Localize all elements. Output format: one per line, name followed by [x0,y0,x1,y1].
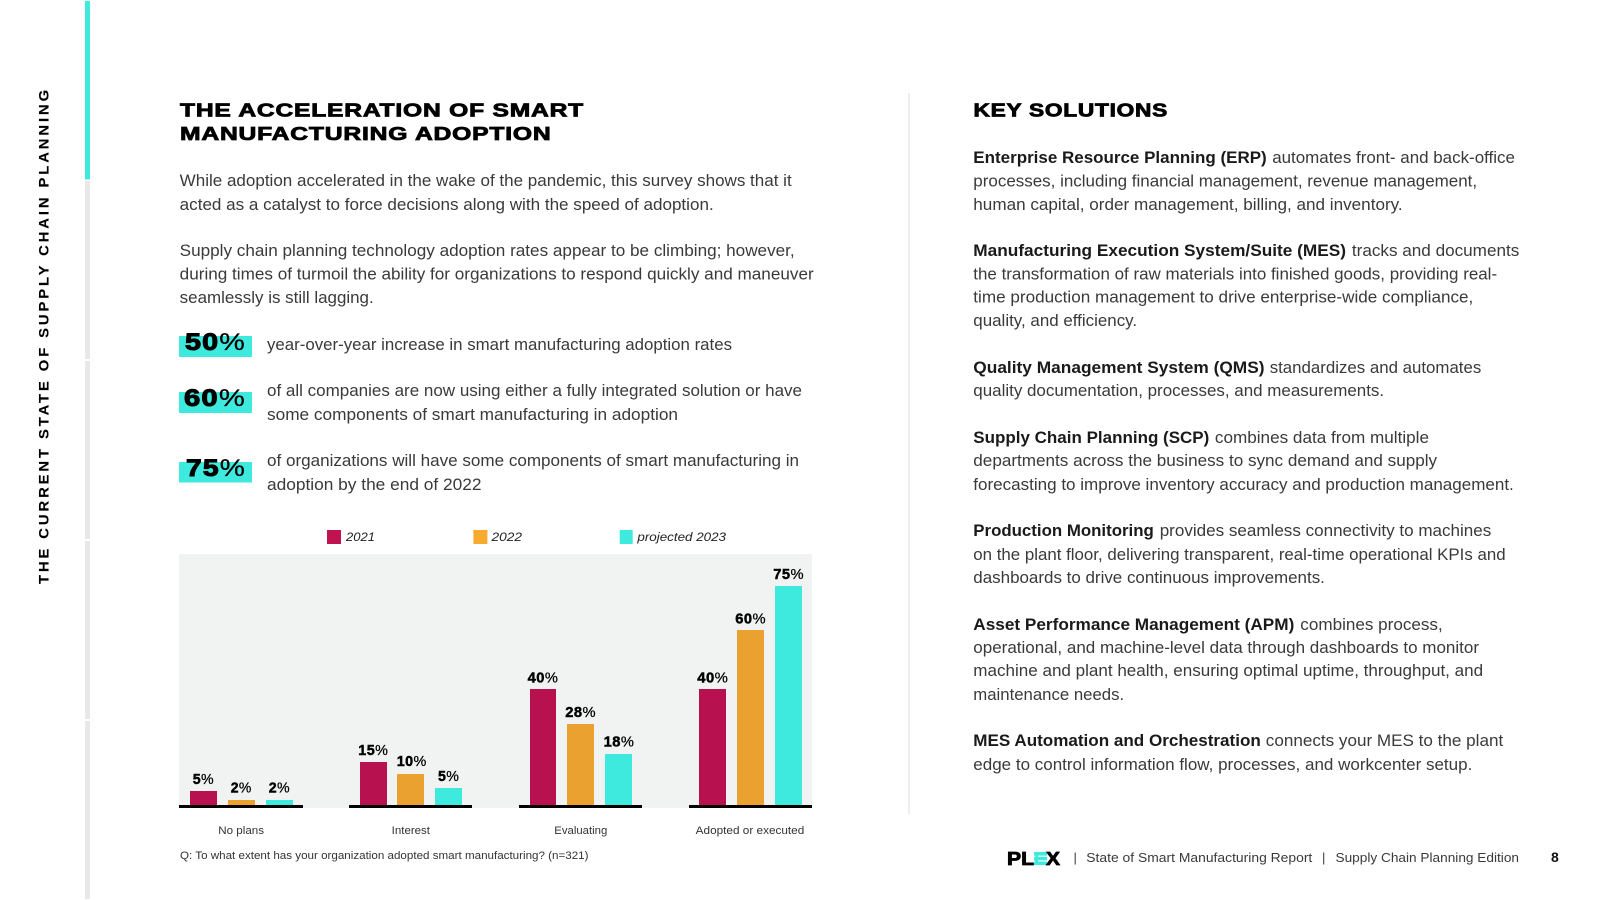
solution: ERP: automates front- and back-office [1272,149,1515,167]
group: evaluating: 28% [565,705,596,721]
stat: 75 percent: 75% [186,455,246,482]
intro paragraph two: during times of turmoil the ability for organizations to respond quickly and maneuver [180,266,814,284]
stat: 50 percent: 50% [185,329,246,356]
plex logo: E [1034,849,1047,869]
solution: QMS: Quality Management System (QMS) [973,359,1264,377]
stat: 50 percent [179,329,732,357]
solution: APM: combines process, [1300,616,1443,634]
solution: production monitoring: provides seamless connectivity to machines [1160,522,1491,540]
intro paragraph one: acted as a catalyst to force decisions along with the speed of adoption. [180,196,714,214]
sidebar progress bar [85,1,90,899]
group: adopted or executed [689,567,812,837]
group: adopted or executed: 40% [697,670,728,686]
stat: 75 percent: of organizations will have some components of smart manufacturing in [267,452,799,470]
intro paragraph one: While adoption accelerated in the wake of the pandemic, this survey shows that it [180,172,792,190]
chart legend: 2021 [345,532,375,544]
solution: APM: machine and plant health, ensuring optimal uptime, throughput, and [973,662,1483,680]
group: interest: 5% [438,769,459,785]
stat: 60 percent: 60% [184,385,246,412]
bar chart: smart manufacturing adoption [179,554,812,837]
solution: MES automation and orchestration: MES Automation and Orchestration [973,732,1261,750]
group: no plans: No plans [218,825,265,837]
group: evaluating [519,670,642,837]
solution: MES automation and orchestration [973,732,1504,774]
group: no plans: 2% [231,780,252,796]
chart legend: 2022 [490,532,523,544]
solution: production monitoring: dashboards to drive continuous improvements. [973,569,1325,587]
group: interest [349,743,472,837]
solution: QMS: quality documentation, processes, and measurements. [973,382,1384,400]
solution: SCP: Supply Chain Planning (SCP) [973,429,1209,447]
solution: APM [973,616,1483,704]
group: no plans: 2% [269,780,290,796]
stat: 75 percent: adoption by the end of 2022 [267,476,482,494]
group: interest: 15% [358,743,388,759]
group: interest: Interest [392,825,430,837]
solution: APM: maintenance needs. [973,686,1124,704]
footer: Supply Chain Planning Edition [1336,850,1519,865]
intro paragraph two: Supply chain planning technology adoption rates appear to be climbing; however, [180,242,795,260]
solution: production monitoring [973,522,1506,587]
footer: | [1074,850,1077,865]
intro paragraph two [180,242,814,307]
solution: APM: operational, and machine-level data through dashboards to monitor [973,639,1480,657]
solution: SCP [973,429,1514,494]
chart legend [327,530,727,544]
footer: 8 [1551,849,1559,865]
solution: MES: the transformation of raw materials into finished goods, providing real- [973,266,1497,284]
footer: State of Smart Manufacturing Report [1086,850,1313,865]
solution: APM: Asset Performance Management (APM) [973,616,1294,634]
chart legend: projected 2023 [636,532,727,544]
solution: MES: time production management to drive enterprise-wide compliance, [973,289,1473,307]
solution: QMS: standardizes and automates [1270,359,1481,377]
group: no plans [179,772,303,837]
solution: ERP: processes, including financial management, revenue management, [973,172,1477,190]
solution: SCP: combines data from multiple [1215,429,1429,447]
plex logo: PL [1007,849,1034,869]
stat: 50 percent: year-over-year increase in smart manufacturing adoption rates [267,336,732,354]
solution: ERP: Enterprise Resource Planning (ERP) [973,149,1267,167]
group: adopted or executed: 75% [773,567,804,583]
group: evaluating: 40% [528,670,558,686]
footer: | [1322,850,1325,865]
group: evaluating: Evaluating [554,825,607,837]
group: no plans: 5% [193,772,214,788]
group: adopted or executed: 60% [735,611,766,627]
solution: MES [973,242,1519,330]
intro paragraph two: seamlessly is still lagging. [180,289,374,307]
solution: SCP: departments across the business to sync demand and supply [973,452,1438,470]
solution: MES: Manufacturing Execution System/Suite (MES) [973,242,1346,260]
footer [1007,849,1559,869]
solution: ERP [973,149,1515,214]
plex logo: X [1046,849,1060,869]
solution: production monitoring: on the plant floor, delivering transparent, real-time operational KPIs and [973,546,1506,564]
solution: production monitoring: Production Monitoring [973,522,1154,540]
solution: ERP: human capital, order management, billing, and inventory. [973,196,1403,214]
plex logo [1007,849,1060,869]
heading: acceleration of smart manufacturing adoption [180,99,584,144]
survey question footnote: Q: To what extent has your organization adopted smart manufacturing? (n=321) [180,850,588,862]
solution: SCP: forecasting to improve inventory accuracy and production management. [973,476,1514,494]
stat: 75 percent [179,452,799,494]
stat: 60 percent: of all companies are now using either a fully integrated solution or have [267,382,802,400]
solution: MES automation and orchestration: edge to control information flow, processes, and workcenter setup. [973,756,1472,774]
solution: MES: quality, and efficiency. [973,312,1137,330]
group: evaluating: 18% [604,734,634,750]
solution: QMS [973,359,1481,400]
stat: 60 percent: some components of smart manufacturing in adoption [267,406,678,424]
solution: MES automation and orchestration: connects your MES to the plant [1266,732,1504,750]
stat: 60 percent [179,382,802,424]
intro paragraph one [180,172,792,214]
group: adopted or executed: Adopted or executed [696,825,804,837]
solution: MES: tracks and documents [1352,242,1519,260]
sidebar vertical title: THE CURRENT STATE OF SUPPLY CHAIN PLANNING [37,87,52,584]
heading: acceleration of smart manufacturing adoption: MANUFACTURING ADOPTION [180,123,552,144]
group: interest: 10% [397,754,427,770]
heading: key solutions: KEY SOLUTIONS [974,99,1168,120]
heading: acceleration of smart manufacturing adoption: THE ACCELERATION OF SMART [180,99,584,120]
